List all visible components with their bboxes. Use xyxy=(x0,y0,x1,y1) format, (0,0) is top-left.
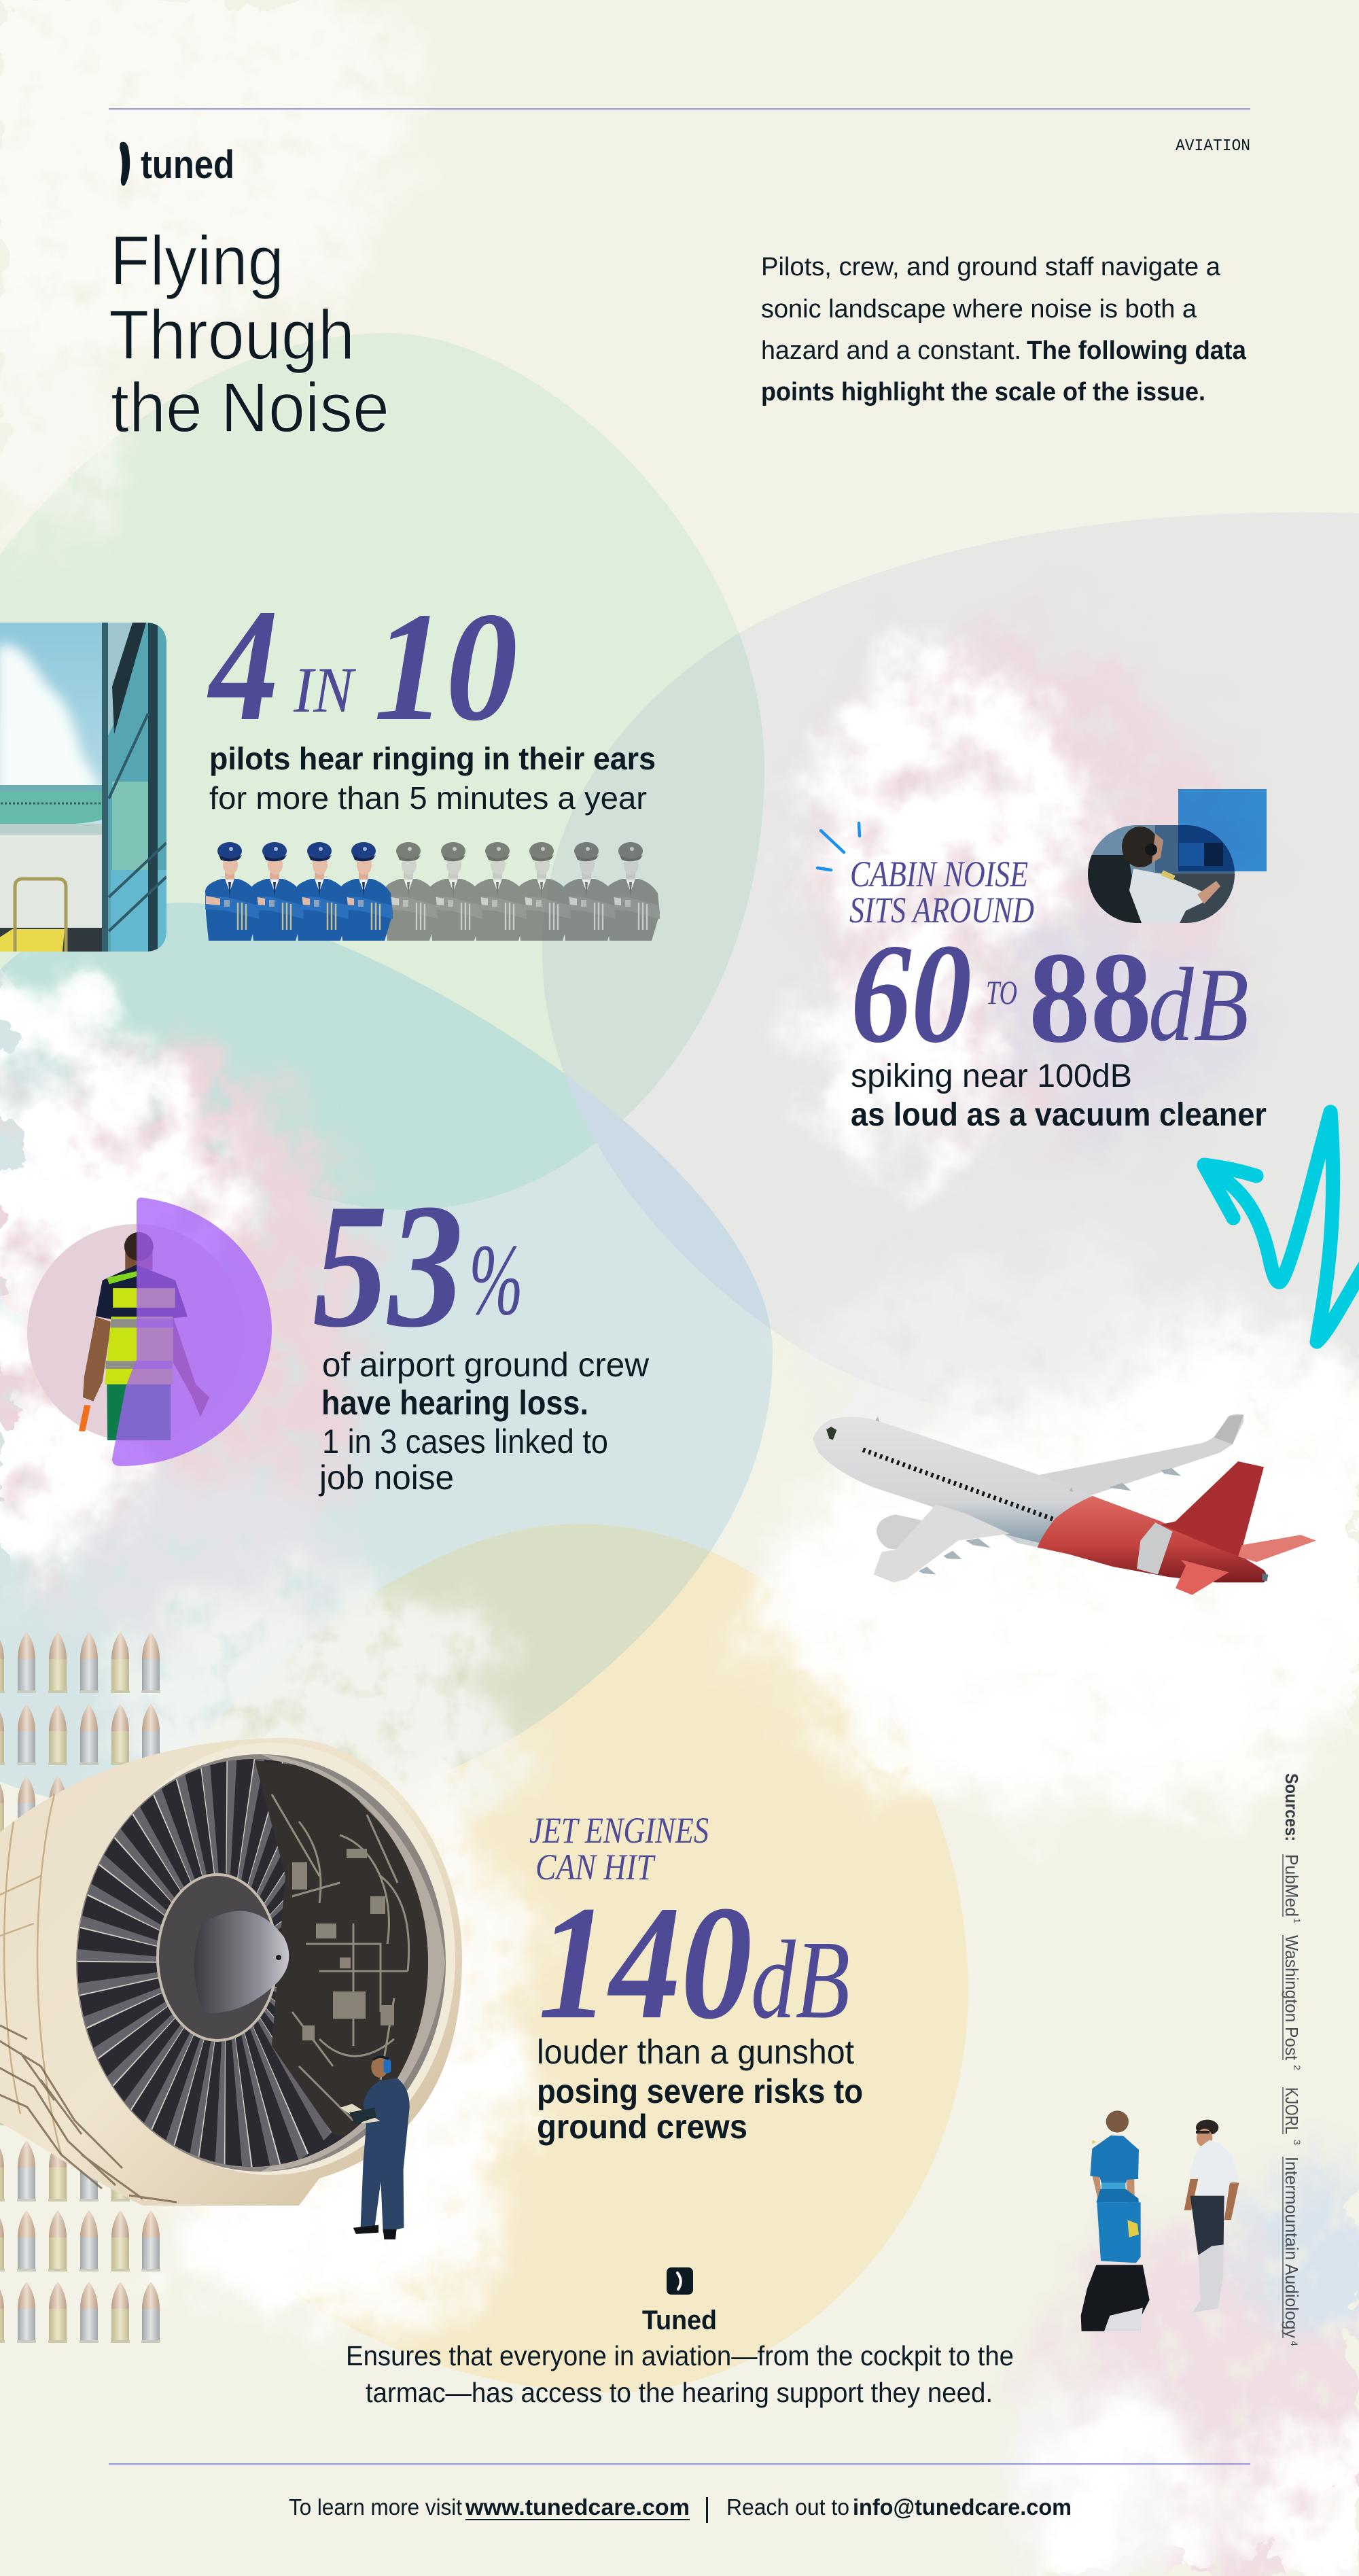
plane windows xyxy=(863,1450,1055,1520)
bullets pattern xyxy=(0,1632,160,2343)
logo: tuned: tuned xyxy=(141,143,234,187)
figures: flight attendant and pilot xyxy=(1081,2110,1239,2331)
pink circle xyxy=(27,1224,245,1442)
icon: tuned mark xyxy=(667,2267,693,2295)
statistic: 53%: 53 xyxy=(313,1167,463,1364)
sources (rotated): 4 xyxy=(1289,2341,1300,2346)
caption xyxy=(851,1058,1267,1133)
intro paragraph: points highlight the scale of the issue. xyxy=(761,378,1205,406)
illustration: jet engine xyxy=(0,1738,462,2206)
caption: have hearing loss. xyxy=(321,1384,588,1422)
panel: 4 in 10 pilots xyxy=(0,576,660,952)
sources (rotated): Sources: xyxy=(1282,1773,1302,1841)
title: Through xyxy=(109,296,355,374)
photo: pilot in cockpit xyxy=(1088,825,1235,923)
arrow: cyan scribble xyxy=(1204,1112,1359,1342)
statistic: 60 to 88dB: 88 xyxy=(1029,925,1152,1070)
top rule xyxy=(109,108,1250,110)
panel: cabin noise xyxy=(817,789,1267,1133)
caption: spiking near 100dB xyxy=(851,1058,1132,1094)
heading: SITS AROUND xyxy=(849,890,1034,930)
statistic: 60 to 88dB: 60 xyxy=(851,915,972,1073)
statistic: 140dB: dB xyxy=(751,1917,850,2042)
closing text xyxy=(346,2340,1014,2408)
panel: 53 percent ground crew xyxy=(27,1167,650,1497)
statistic: 60 to 88dB: dB xyxy=(1148,946,1249,1063)
intro paragraph: sonic landscape where noise is both a xyxy=(761,295,1197,324)
heading xyxy=(529,1810,709,1887)
statistic: 4 in 10: 4 xyxy=(207,576,279,754)
title xyxy=(109,222,389,447)
sources (rotated): 3 xyxy=(1292,2140,1303,2145)
figure: ground crew worker xyxy=(82,1232,209,1440)
heading: CAN HIT xyxy=(535,1847,656,1887)
caption: 1 in 3 cases linked to xyxy=(322,1423,608,1461)
intro paragraph xyxy=(761,253,1247,406)
sources (rotated): 2 xyxy=(1292,2065,1303,2070)
sources (rotated): Intermountain Audiology xyxy=(1282,2157,1302,2338)
caption: for more than 5 minutes a year xyxy=(209,780,647,816)
caption: pilots hear ringing in their ears xyxy=(209,741,656,776)
closing: tuned mission xyxy=(346,2267,1014,2408)
title: Flying xyxy=(110,222,284,300)
footer: To learn more visit xyxy=(289,2494,462,2520)
statistic: 4 in 10 xyxy=(207,576,518,754)
title: the Noise xyxy=(111,368,389,447)
caption: of airport ground crew xyxy=(322,1346,650,1384)
category label: AVIATION xyxy=(1176,137,1250,156)
closing text: Ensures that everyone in aviation—from the cockpit to the xyxy=(346,2340,1014,2371)
intro paragraph: Pilots, crew, and ground staff navigate a xyxy=(761,253,1221,281)
sources (rotated): Washington Post xyxy=(1282,1935,1302,2061)
intro paragraph: The following data xyxy=(1027,336,1247,365)
statistic: 60 to 88dB: TO xyxy=(986,973,1017,1011)
figure: technician xyxy=(340,2057,410,2240)
blue square xyxy=(1178,789,1267,871)
caption: ground crews xyxy=(537,2108,747,2146)
statistic: 140dB: 140 xyxy=(538,1872,752,2053)
caption xyxy=(209,741,656,816)
footer: Reach out to xyxy=(726,2494,849,2520)
heading: JET ENGINES xyxy=(529,1810,709,1851)
bottom rule xyxy=(109,2463,1250,2465)
footer: www.tunedcare.com xyxy=(465,2494,690,2520)
purple half disc xyxy=(112,1198,272,1466)
caption xyxy=(537,2033,863,2146)
caption: as loud as a vacuum cleaner xyxy=(851,1097,1267,1133)
sources (rotated) xyxy=(1282,1773,1303,2346)
statistic: 53%: % xyxy=(469,1223,523,1336)
caption xyxy=(318,1346,650,1497)
caption: louder than a gunshot xyxy=(537,2033,854,2071)
colour blobs xyxy=(0,333,1359,2392)
statistic: 4 in 10: IN xyxy=(293,654,356,726)
photo: airport window xyxy=(0,623,166,952)
statistic: 60 to 88dB xyxy=(851,915,1249,1073)
footer: info@tunedcare.com xyxy=(853,2494,1072,2520)
intro paragraph: hazard and a constant. xyxy=(761,336,1021,365)
pilots pictogram: 4 of 10 highlighted xyxy=(205,842,660,941)
sources (rotated): PubMed xyxy=(1282,1854,1302,1917)
illustration: airplane xyxy=(813,1414,1316,1595)
heading xyxy=(849,854,1034,930)
closing text: tarmac—has access to the hearing support they need. xyxy=(366,2377,993,2408)
brand name: Tuned xyxy=(642,2305,717,2335)
sources (rotated): 1 xyxy=(1292,1918,1303,1924)
icon: sparks xyxy=(817,823,860,870)
sources (rotated): KJORL xyxy=(1282,2087,1302,2134)
panel: 140dB jet engines xyxy=(0,1632,863,2343)
heading: CABIN NOISE xyxy=(850,854,1028,894)
caption: job noise xyxy=(318,1459,454,1497)
caption: posing severe risks to xyxy=(537,2072,863,2110)
footer xyxy=(289,2494,1072,2523)
statistic: 4 in 10: 10 xyxy=(374,580,518,753)
